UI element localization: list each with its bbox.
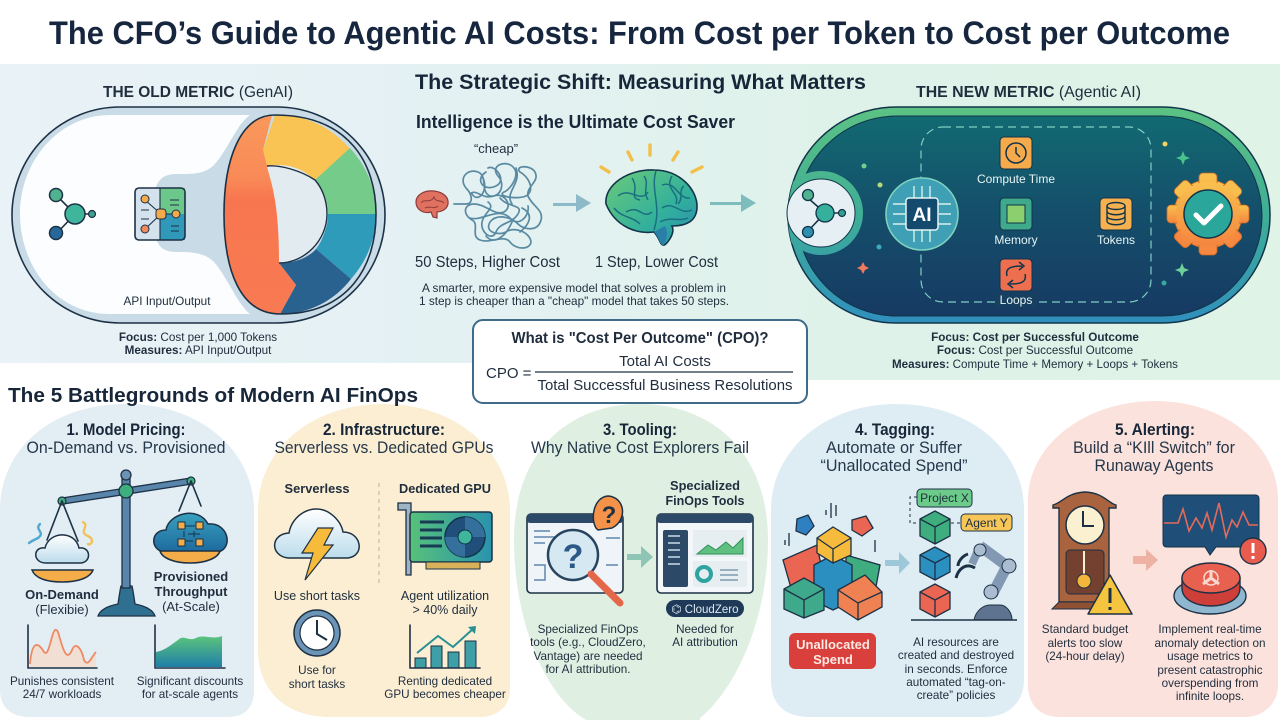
item: memory: Memory bbox=[994, 233, 1038, 247]
card heading: 1. Model Pricing: bbox=[66, 420, 186, 439]
label: 50 steps: 50 Steps, Higher Cost bbox=[415, 254, 561, 271]
icon: API gateway card bbox=[135, 188, 185, 240]
tag: project X: Project X bbox=[920, 491, 969, 505]
badge: unallocated spend: Unallocated bbox=[796, 637, 870, 652]
caption: renting GPU bbox=[384, 675, 506, 701]
card heading: Runaway Agents bbox=[1094, 457, 1214, 475]
caption: needed bbox=[672, 623, 738, 649]
caption: renting GPU: Renting dedicated bbox=[398, 675, 492, 688]
CPO formula: Total Successful Business Resolutions bbox=[538, 377, 792, 394]
caption: needed: Needed for bbox=[676, 623, 734, 636]
icon: failing cost explorer: ? bbox=[602, 502, 616, 529]
icon: grandfather clock bbox=[1052, 492, 1116, 609]
label: specialized tools bbox=[666, 478, 744, 508]
card heading: “Unallocated Spend” bbox=[820, 457, 968, 475]
icon: GPU card bbox=[398, 503, 492, 575]
label: specialized tools: Specialized bbox=[670, 478, 740, 493]
donut chart bbox=[224, 115, 376, 314]
caption: native tools bbox=[530, 623, 646, 676]
caption: resources: AI resources are bbox=[913, 636, 999, 649]
card background bbox=[258, 404, 510, 717]
caption: anomaly detection: usage metrics to bbox=[1167, 650, 1253, 663]
badge: unallocated spend bbox=[789, 633, 876, 669]
line chart: spiky usage bbox=[28, 625, 97, 668]
new metric focus caption: Measures: Compute Time + Memory + Loops + Tokens bbox=[892, 358, 1178, 371]
card heading: 2. Infrastructure: bbox=[323, 420, 445, 439]
card heading: On-Demand vs. Provisioned bbox=[26, 439, 226, 457]
caption: resources: create” policies bbox=[917, 689, 995, 702]
caption: anomaly detection: anomaly detection on bbox=[1154, 637, 1266, 650]
card heading bbox=[26, 420, 226, 457]
panel: tooling bbox=[514, 404, 768, 720]
caption: standard budget alerts bbox=[1042, 623, 1129, 663]
card heading: 3. Tooling: bbox=[603, 420, 677, 439]
subheading: intelligence: Intelligence is the Ultimate Cost Saver bbox=[416, 112, 735, 132]
card heading bbox=[531, 420, 749, 457]
caption: provisioned: Significant discounts bbox=[137, 675, 243, 688]
label: on-demand: (Flexibie) bbox=[35, 602, 89, 617]
explanation text: A smarter, more expensive model that solves a problem in bbox=[422, 281, 726, 295]
caption: on-demand: Punishes consistent bbox=[10, 675, 115, 688]
item: memory bbox=[994, 198, 1038, 247]
label: provisioned: (At-Scale) bbox=[162, 599, 220, 614]
caption: needed: AI attribution bbox=[672, 636, 738, 649]
label: cheap: “cheap” bbox=[474, 141, 518, 156]
heading: old metric: THE OLD METRIC (GenAI) bbox=[103, 84, 293, 101]
panel: model pricing bbox=[0, 404, 254, 717]
card background bbox=[0, 404, 254, 717]
icon: robot arm bbox=[911, 544, 1017, 620]
CPO formula: CPO = bbox=[486, 365, 532, 382]
callout heading: What is "Cost Per Outcome" (CPO)? bbox=[512, 330, 768, 347]
icon: warning triangle bbox=[1088, 575, 1132, 614]
caption: native tools: for AI attribution. bbox=[545, 663, 631, 676]
caption: standard budget alerts: alerts too slow bbox=[1048, 637, 1123, 650]
icon: alert badge bbox=[1240, 538, 1266, 564]
caption: native tools: tools (e.g., CloudZero, bbox=[530, 636, 646, 649]
item: compute time: Compute Time bbox=[977, 172, 1055, 186]
icon: idea rays bbox=[601, 145, 702, 172]
panel: strategic shift bbox=[415, 70, 866, 308]
card heading: 5. Alerting: bbox=[1115, 420, 1195, 439]
sparkles bbox=[857, 142, 1190, 286]
label: provisioned: Throughput bbox=[155, 584, 228, 599]
item: loops bbox=[995, 259, 1037, 308]
new metric focus caption: Focus: Cost per Successful Outcome bbox=[937, 344, 1133, 357]
tag: agent Y: Agent Y bbox=[965, 516, 1008, 530]
explanation text bbox=[419, 281, 729, 308]
item: compute time bbox=[977, 137, 1055, 186]
caption: provisioned: for at-scale agents bbox=[142, 688, 238, 701]
heading: new metric: THE NEW METRIC (Agentic AI) bbox=[916, 84, 1141, 101]
icon: pile of cubes bbox=[783, 503, 882, 620]
caption: anomaly detection bbox=[1154, 623, 1266, 703]
caption: on-demand: 24/7 workloads bbox=[23, 688, 101, 701]
panel: new metric bbox=[779, 84, 1270, 371]
caption: native tools: Vantage) are needed bbox=[534, 650, 642, 663]
text: agent utilization: Agent utilization bbox=[401, 589, 489, 603]
card heading: Why Native Cost Explorers Fail bbox=[531, 439, 749, 457]
card heading bbox=[1073, 420, 1235, 475]
card heading: Build a “KIll Switch” for bbox=[1073, 439, 1235, 457]
item: tokens: Tokens bbox=[1097, 233, 1135, 247]
CPO formula bbox=[486, 353, 793, 394]
callout: cost per outcome bbox=[473, 320, 807, 403]
tag: project X bbox=[917, 489, 972, 507]
caption: standard budget alerts: (24-hour delay) bbox=[1045, 650, 1125, 663]
caption: use for short tasks bbox=[289, 664, 345, 691]
caption: resources bbox=[898, 636, 1014, 702]
title: The CFO’s Guide to Agentic AI Costs: From Cost per Token to Cost per Outcome bbox=[49, 15, 1230, 51]
icon: anomaly monitor bbox=[1163, 495, 1259, 555]
item: loops: Loops bbox=[1000, 293, 1032, 307]
label: API input/output: API Input/Output bbox=[124, 295, 211, 308]
icon: FinOps dashboard bbox=[657, 514, 753, 593]
label: on-demand: On-Demand bbox=[25, 587, 99, 602]
arrow bbox=[710, 194, 756, 212]
badge: CloudZero bbox=[666, 600, 744, 617]
old metric focus caption: Focus: Cost per 1,000 Tokens bbox=[119, 331, 277, 344]
card background bbox=[771, 404, 1024, 717]
label: provisioned bbox=[154, 569, 228, 614]
agentic capsule bbox=[779, 107, 1270, 323]
old metric focus caption: Measures: API Input/Output bbox=[125, 344, 272, 357]
divider bbox=[378, 483, 380, 585]
caption: use for short tasks: Use for bbox=[298, 664, 336, 677]
icon: tangled path bbox=[454, 164, 541, 248]
text: use short tasks: Use short tasks bbox=[274, 589, 360, 603]
icon: network nodes bbox=[50, 188, 96, 240]
new metric focus caption: Focus: Cost per Successful Outcome bbox=[931, 331, 1139, 344]
label: serverless: Serverless bbox=[284, 481, 350, 496]
icon: storm cloud bbox=[275, 509, 359, 580]
area chart: steady usage bbox=[155, 625, 225, 668]
icon: failing cost explorer: ? bbox=[563, 538, 583, 576]
icon: AI chip: AI bbox=[912, 205, 932, 226]
label: specialized tools: FinOps Tools bbox=[666, 493, 744, 508]
arrow bbox=[627, 546, 653, 568]
tag connectors bbox=[910, 497, 961, 523]
arrow bbox=[1133, 549, 1158, 571]
caption: anomaly detection: present catastrophic bbox=[1157, 664, 1263, 677]
old metric focus caption bbox=[119, 331, 277, 357]
tag: agent Y bbox=[961, 514, 1012, 531]
badge: unallocated spend: Spend bbox=[813, 652, 853, 667]
icon: kill switch button bbox=[1174, 563, 1246, 614]
panel: alerting bbox=[1028, 401, 1278, 717]
icon: smart brain bbox=[606, 170, 697, 245]
chart: bars with trend bbox=[410, 625, 480, 668]
caption: resources: automated “tag-on- bbox=[906, 676, 1006, 689]
item: tokens bbox=[1097, 198, 1135, 247]
explanation text: 1 step is cheaper than a "cheap" model that takes 50 steps. bbox=[419, 294, 729, 308]
dashed group box bbox=[921, 127, 1151, 302]
caption: anomaly detection: infinite loops. bbox=[1176, 690, 1244, 703]
icon: success gear bbox=[1167, 173, 1249, 255]
heading: battlegrounds: The 5 Battlegrounds of Modern AI FinOps bbox=[8, 384, 418, 407]
label: 1 step: 1 Step, Lower Cost bbox=[595, 254, 719, 271]
caption: native tools: Specialized FinOps bbox=[538, 623, 638, 636]
card background bbox=[1028, 401, 1278, 717]
label: dedicated GPU: Dedicated GPU bbox=[399, 481, 491, 496]
panel: infrastructure bbox=[258, 404, 510, 717]
text: agent utilization bbox=[401, 589, 489, 617]
caption: renting GPU: GPU becomes cheaper bbox=[384, 688, 506, 701]
new metric focus caption bbox=[892, 331, 1178, 371]
card background bbox=[514, 404, 768, 720]
badge: CloudZero: ⌬ CloudZero bbox=[672, 604, 738, 616]
icon: clock bbox=[294, 610, 340, 656]
caption: anomaly detection: Implement real-time bbox=[1158, 623, 1262, 636]
card heading: Serverless vs. Dedicated GPUs bbox=[274, 439, 494, 457]
card heading: Automate or Suffer bbox=[826, 439, 962, 457]
caption: provisioned bbox=[137, 675, 243, 701]
card heading bbox=[820, 420, 968, 475]
panel: old metric bbox=[12, 84, 385, 357]
CPO formula: Total AI Costs bbox=[619, 353, 711, 370]
arrow bbox=[553, 194, 591, 212]
caption: standard budget alerts: Standard budget bbox=[1042, 623, 1129, 636]
icon: AI chip bbox=[886, 178, 958, 250]
caption: resources: created and destroyed bbox=[898, 649, 1014, 662]
card heading: 4. Tagging: bbox=[855, 420, 935, 439]
tagged cubes bbox=[920, 511, 950, 617]
caption: use for short tasks: short tasks bbox=[289, 678, 345, 691]
icon: failing cost explorer bbox=[527, 496, 623, 603]
icon: balance scale bbox=[29, 470, 227, 616]
text: agent utilization: > 40% daily bbox=[413, 603, 478, 617]
card heading bbox=[274, 420, 494, 457]
label: provisioned: Provisioned bbox=[154, 569, 228, 584]
icon: network nodes bbox=[802, 190, 846, 238]
caption: resources: in seconds. Enforce bbox=[905, 663, 1007, 676]
heading: strategic shift: The Strategic Shift: Measuring What Matters bbox=[415, 70, 866, 94]
caption: anomaly detection: overspending from bbox=[1162, 677, 1258, 690]
arrow bbox=[885, 552, 910, 574]
old metric capsule bbox=[12, 107, 385, 323]
label: on-demand bbox=[25, 587, 99, 617]
background band bbox=[0, 64, 1280, 380]
panel: tagging bbox=[771, 404, 1024, 717]
icon: small red brain bbox=[416, 191, 448, 218]
caption: on-demand bbox=[10, 675, 115, 701]
